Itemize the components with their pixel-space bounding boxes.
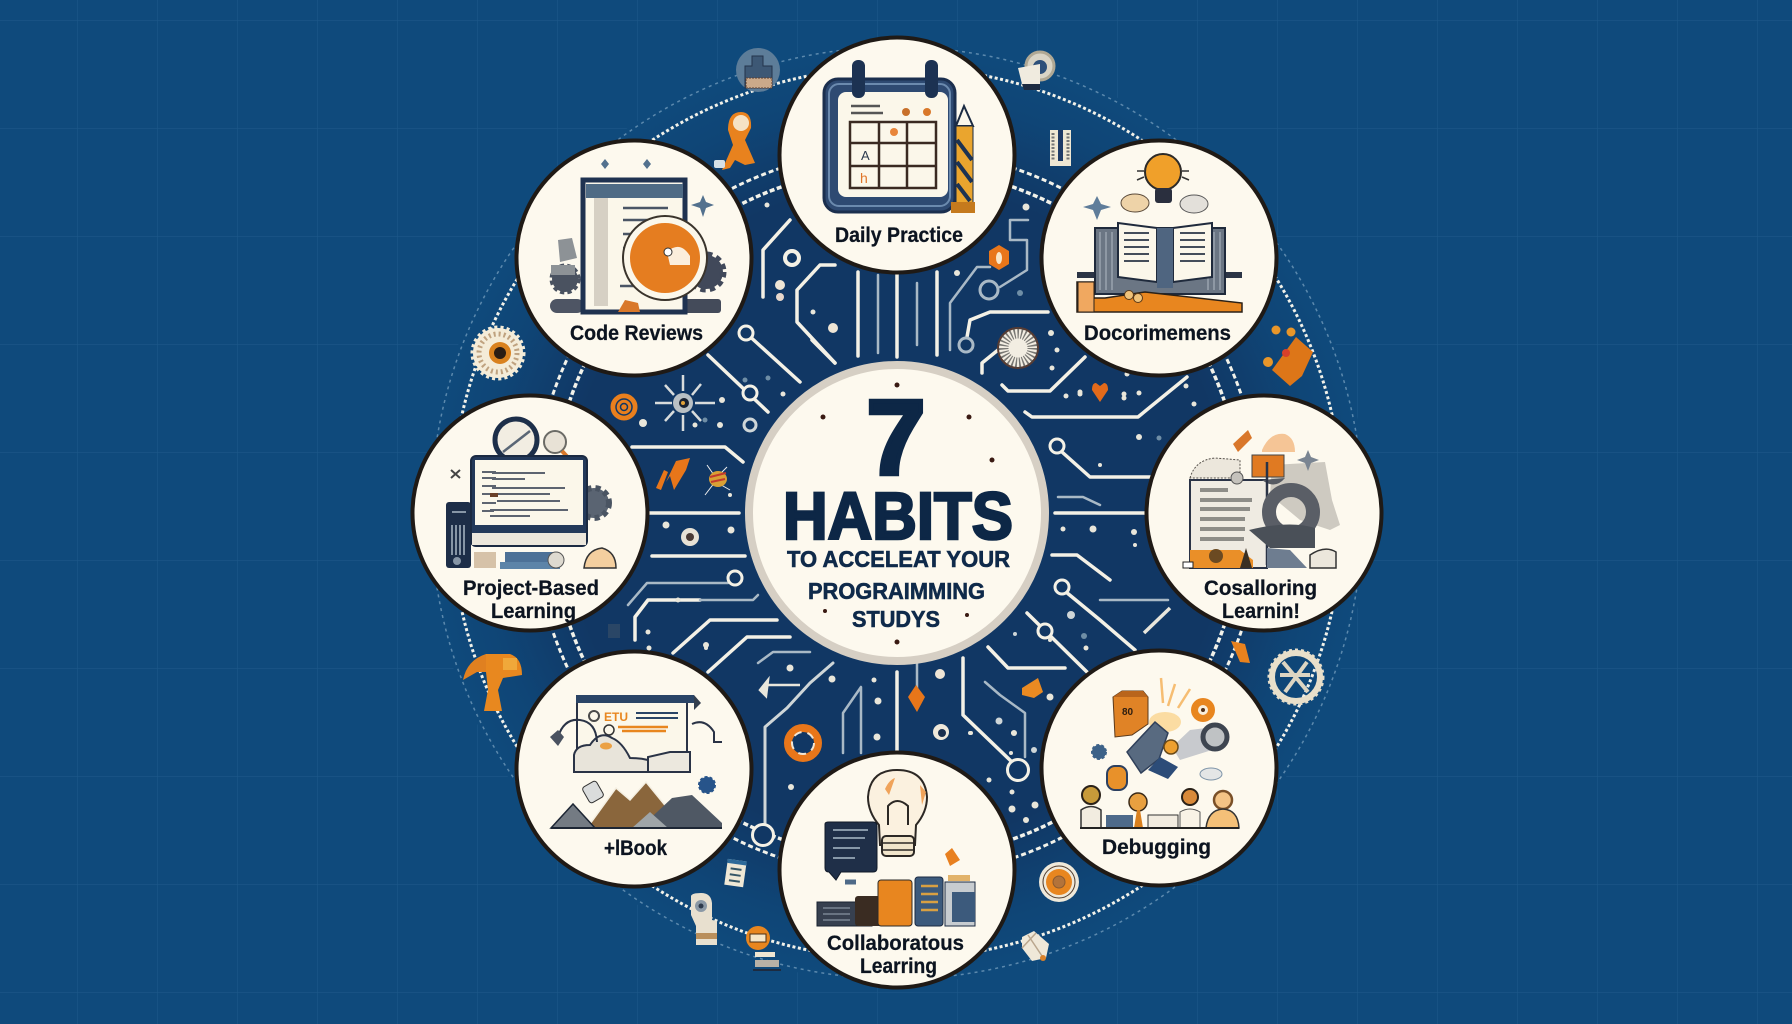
icon: orange crown xyxy=(1263,326,1313,386)
icon: orange target xyxy=(611,394,637,420)
label: Debugging xyxy=(1102,836,1211,859)
icons on the outer rings xyxy=(463,48,1323,970)
icon: tower xyxy=(446,502,471,568)
icon: clouds xyxy=(550,720,722,772)
icon: monitor xyxy=(471,456,587,569)
icon: orange hexagon xyxy=(989,245,1009,270)
panel: collaboratous learning xyxy=(780,752,1014,988)
icon: browser window: ETU xyxy=(604,710,628,724)
decorative rim dots xyxy=(820,382,994,644)
icon: target xyxy=(1039,862,1079,902)
icon: orange chip xyxy=(1022,678,1043,698)
icon: camera xyxy=(1018,52,1054,90)
small icons inside the network xyxy=(611,245,1250,758)
icon: orange ring xyxy=(788,728,818,758)
icon: radial spark eye xyxy=(655,375,715,431)
label line 2: Learnin! xyxy=(1222,600,1300,623)
icon: bandage xyxy=(1022,931,1049,961)
icon: orange diamond xyxy=(908,685,925,712)
icon: castle xyxy=(736,48,780,92)
label: Code Reviews xyxy=(570,322,703,345)
label line 1: Cosalloring xyxy=(1204,577,1317,600)
panel: debugging xyxy=(1042,650,1276,886)
scattered dots xyxy=(639,202,1196,823)
icon: document xyxy=(583,180,685,312)
icon: head and tools xyxy=(1231,430,1319,565)
centre title disc xyxy=(749,365,1045,661)
label line 2: Learring xyxy=(860,955,937,978)
icon: calendar xyxy=(824,60,955,212)
label: +lBook xyxy=(604,837,667,860)
icon: open book xyxy=(1077,223,1242,294)
title word: HABITS xyxy=(783,479,1013,554)
icon: orange box: 80 xyxy=(1122,707,1134,718)
icon: magnifier xyxy=(618,216,707,312)
icon: gears xyxy=(550,238,723,315)
icon: cream capsule xyxy=(691,893,717,945)
title number: 7 xyxy=(867,379,925,497)
icon: gear xyxy=(579,488,609,518)
subtitle line 2: PROGRAIMMING xyxy=(808,578,985,604)
icon: spanner xyxy=(1144,608,1170,633)
icon: browser window xyxy=(576,695,701,762)
icon: orange coin stack xyxy=(746,926,781,970)
icon: small document xyxy=(724,859,747,887)
icon: light bulb xyxy=(1137,154,1189,203)
icon: cream ring xyxy=(681,528,699,546)
icon: orange folder xyxy=(1183,548,1253,568)
panel: project-based learning xyxy=(412,396,648,630)
icon: mesh disc xyxy=(998,328,1038,368)
subtitle line 1: TO ACCELEAT YOUR xyxy=(787,546,1010,572)
icon: orange heart xyxy=(1092,383,1108,402)
panel: book xyxy=(516,652,752,886)
icon: desk items xyxy=(451,470,616,568)
icon: calendar: A xyxy=(861,148,870,163)
icon: swirl ring xyxy=(933,724,949,740)
icon: ruler xyxy=(1050,130,1071,166)
circuit traces xyxy=(628,220,1187,827)
icon: grey device xyxy=(1127,722,1212,779)
label line 1: Project-Based xyxy=(463,577,599,600)
icon: orange figure xyxy=(714,112,755,170)
label line 1: Collaboratous xyxy=(827,932,964,955)
panel: daily practice xyxy=(780,38,1014,272)
panel: collaborative learning (top right) xyxy=(1146,396,1382,630)
circuit nodes xyxy=(728,251,1069,846)
icon: smudge xyxy=(1270,462,1340,530)
label line 2: Learning xyxy=(491,600,576,623)
icon: cream gear xyxy=(1269,650,1323,704)
icon: cream pin xyxy=(775,280,945,679)
label: Docorimemens xyxy=(1084,322,1231,345)
icon: orange base xyxy=(1077,282,1242,312)
subtitle line 3: STUDYS xyxy=(852,606,940,632)
icon: pencil xyxy=(951,106,975,213)
icon: clouds and spark xyxy=(1083,194,1208,220)
dotted orbit rings xyxy=(431,47,1363,979)
icon: small badge xyxy=(608,624,620,638)
icon: gears: xOO xyxy=(660,303,680,315)
icon: sun rays xyxy=(1149,678,1190,732)
label: Daily Practice xyxy=(835,224,963,247)
icon: code chat bubble xyxy=(825,822,877,882)
icon: target and wheel xyxy=(1092,698,1227,790)
icon: sun badge xyxy=(473,328,523,378)
icon: people xyxy=(1080,786,1239,828)
icon: mountains xyxy=(551,777,722,828)
icon: server stack xyxy=(817,848,975,926)
icon: document xyxy=(1190,458,1267,568)
icon: light bulb xyxy=(868,770,927,856)
icon: bug xyxy=(705,465,730,495)
panel: documentation xyxy=(1042,140,1276,376)
icon: grey ring xyxy=(1249,490,1315,568)
panel: code reviews xyxy=(516,140,752,376)
icon: sparkles xyxy=(601,159,714,217)
icon: small orange bug xyxy=(1231,641,1250,663)
icon: magnifier xyxy=(495,419,572,462)
icon: small quill xyxy=(760,680,800,696)
icon: calendar: h xyxy=(860,170,868,186)
icon: orange stripes xyxy=(656,458,690,490)
icon: orange box xyxy=(1113,691,1148,737)
icon: orange anvil xyxy=(463,654,522,711)
